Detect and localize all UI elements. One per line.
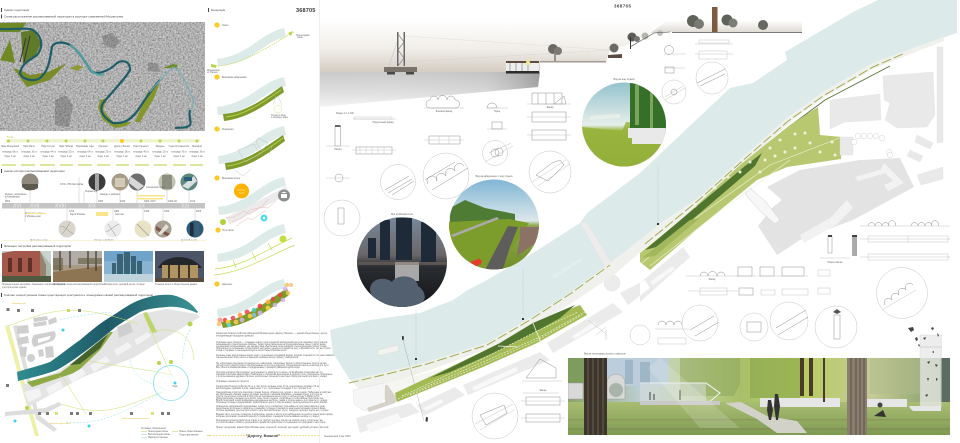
viewpoint dashed links [416,166,658,368]
programme columns text and bars: берег 3 км [191,156,203,158]
programme columns text and bars: Дорогу, Вишня [114,146,131,148]
history timeline bar: XVII [30,204,39,210]
programme columns text and bars: площадь 64 га [77,152,93,154]
panorama: water [320,72,540,107]
programme columns text and bars: берег 1 км [154,156,166,158]
photo circle: lawn and deck [582,78,666,166]
heading: site photos: Фиксация: застройка рассматриваемой территории [4,244,71,248]
history timeline bar: XVI [13,204,21,210]
floating barge on plan [378,345,399,356]
photo: brick factory [2,251,51,282]
programme columns text and bars: Парк Сетунь [41,146,56,148]
programme columns text and bars: Воробьёвы горы [76,146,94,148]
history timeline bar [2,203,205,210]
programme columns text and bars: Парк Фили [23,145,35,148]
photo: bare trees [53,251,102,282]
explanatory text block: спорта, культурных событий и прогулок на протяжении всего года, в любую погоду и время суток. [216,395,321,398]
aerial map of Moskva river [0,22,205,131]
drawing sheet label: Разрез 1-1 1:100 [336,113,354,115]
history captions: 1700–1750 Застройка [60,183,84,186]
programme columns text and bars: Марьино [192,146,202,148]
diagram 1: links: Связи [222,25,229,27]
pavilion with stair drawings: Фасад [547,106,554,109]
explanatory text block: Реализация проекта разбита на этапы и не требует крупных затрат на первом этапе строительства, [216,420,323,422]
photo circle: night city screen [355,214,450,310]
panorama section drawings: left [380,96,513,200]
programme columns text and bars: площадь 30 га [21,152,37,154]
programme columns text and bars: Парк Горького [133,146,149,148]
diagram 1: links: от. Вишня [207,72,218,74]
context plan: cyan dashed routes [60,312,190,423]
diagram 2: embankment [214,74,288,121]
history captions: Заводы и фабрики [100,193,121,196]
programme columns text and bars: площадь 40 га [133,152,149,154]
promenade strip [350,37,944,390]
history captions [5,183,202,242]
history photos, top row [22,174,198,190]
upper right small drawings [662,40,733,104]
programme columns text and bars: площадь 70 га [171,152,187,154]
diagram 4: Moscow City link [214,175,290,226]
history timeline bar: XX [138,204,145,210]
explanatory text block: которые дополняют основной маршрут и расширяют сценарии использования на воде и у воды. [216,415,319,418]
page corner mark [207,434,210,436]
context plan: legend: Точки притяжения [179,434,199,436]
explanatory text block: Проект предлагает новый образ Москвы-реки: открытый, зелёный, цветущий, удобный для всех жителей. [216,426,329,429]
diagram 5: paths: Пути связи [222,230,234,232]
explanatory text block: как связующий элемент между деловым центром и жилыми районами, создавая среду для отдыха, [216,393,323,396]
programme columns text and bars: Парк Мещерский [1,145,20,148]
context plan: green nodes [25,322,192,410]
explanatory text block: Особое внимание уделено доступности для маломобильных групп, пандусы проходят вдоль всех террас. [216,410,330,412]
explanatory text block: Водная часть получает плавучие платформы, причал и места для наблюдения за рекой и панорамой города, [216,413,334,416]
programme columns text and bars: площадь 22 га [95,152,111,154]
diagram 2: embankment: Спуски к воде [271,115,287,117]
tower drawings: Разрез [334,149,342,151]
photo circle: cycle path [449,175,539,270]
explanatory text block: велосипедные дорожки 4,2 км, павильоны 7 шт., смотровые площадки 3 шт., причал 1 шт. [216,388,312,390]
explanatory text block: определяющим образ места и дающим название всему проекту набережной. [216,356,299,359]
programme columns text and bars: Лужники [98,146,108,148]
photo captions: и исторические здания [2,287,27,289]
programme columns text and bars: берег 2 км [97,156,109,158]
project slogan: "Дорогу, Вишня!" [246,433,280,438]
lower sketch: centre [472,359,565,439]
history captions: Дворцовые сады [25,213,43,215]
programme columns text and bars: площадь 18 га [114,152,130,154]
diagram 6: colourful cherry blossoms: Цветение [222,284,233,286]
river label: МОСКВА РЕКА [552,257,583,279]
long pavilion elevation [352,117,396,154]
explanatory text block: Территория благоустройства 22 га, в том числе зелёные зоны 14 га, пешеходные дорожки 3,5 км, [216,385,320,388]
context plan: yellow labels: Новые общественные пространства [122,418,149,420]
panorama: viewing rays [405,36,610,62]
history captions: 1930 [120,201,126,203]
programme columns text and bars: площадь 36 га [189,152,205,154]
context plan: legend: Новые общественные [179,431,203,433]
explanatory text block: связывающих существующие районы. Территория разделена на функциональные зоны с различными [216,343,326,346]
history divider [2,240,206,242]
photo captions: Прибрежная зона рассматриваемой территории [53,283,105,286]
explanatory text block: Ландшафтная структура повторяет линию берега, образуя ряд террас и тихих садов. Набережная работает [216,391,332,394]
programme columns text and bars: берег 4 км [173,156,185,158]
programme columns text and bars: Сады Коломенское [169,146,190,148]
diagram 1: links: Пешеходная [296,35,310,37]
photo captions: Москва-Сити: деловой центр столицы [104,283,145,286]
programme columns text and bars: берег 4 км [60,156,72,158]
heading: concept: Концепция [211,8,226,12]
history captions: 1700 [69,211,75,213]
programme columns text and bars: Парк Победы [59,146,73,148]
programme columns text and bars: площадь 58 га [2,152,18,154]
context plan: legend: Велосипедная связь [148,434,171,436]
history captions: 1880 [98,201,104,203]
history highlight marks [26,195,165,216]
panorama: trees and ground [540,7,802,62]
diagram 1: links [207,22,310,74]
history timeline bar: XVIII [55,204,66,210]
upper park [640,107,842,270]
history captions: 2010 [190,201,196,203]
context plan: connection lines [8,310,194,414]
history captions: Первое упоминание [5,194,27,196]
explanatory text block: Сезонные посадки поддерживают разнообразие цвета и обеспечивают привлекательность набережной. [216,401,328,404]
context site plan [5,295,200,436]
plan label: Генеральный план 1:500 [324,435,351,438]
explanatory text block: Все объекты взаимосвязаны и поддерживают сценарий движения вдоль воды. [216,366,301,369]
panorama: upper sky gradient [650,20,802,33]
history captions: Сталинский план [146,186,165,189]
history captions: Деловой центр [181,239,198,242]
explanatory text block: Предусмотрены площадки для детей, зоны тихого отдыха, спортивные и событийные пространства. [216,397,324,400]
explanatory text block: Предлагается сохранение исторической застройки, раскрытие видов на реку и Москва-Сити, новые спуски [216,347,331,350]
pedestrian bridge [580,221,620,291]
explanatory text block: лёгкие конструкции которых сформированы из круглых модулей, объединённых вдоль пешеходного пути. [216,364,330,367]
explanatory text block: Основная идея проекта — создание нового типа городской набережной как цепи парковых пространств, [216,341,328,344]
context plan: cyan radius circle: Парк [172,386,179,388]
history captions: 1990–00 [168,201,178,203]
photo captions: Промышленная застройка, Хамовники, кирпичные корпуса [2,283,66,286]
heading: historical analysis: Анализ истории рассматриваемой территории [4,169,65,173]
sketch row: right middle [588,267,928,348]
right plan: buildings [830,47,943,185]
context plan: yellow labels [12,303,149,425]
history captions: 1960–1970 [144,201,156,203]
upper right elevations [820,221,950,264]
project number, panel 3: 368705 [614,4,632,8]
diagram 3: connections [214,126,286,176]
history timeline bar: XXI [181,204,189,210]
right plan: tree clusters [851,133,893,158]
diagram 6: colourful cherry blossoms [214,279,293,328]
history leader lines [6,177,195,222]
panel divider [318,0,320,443]
panorama section drawings: left: Торец [494,111,501,113]
programme columns text and bars: берег 1 км [116,156,128,158]
explanatory text block [216,332,337,429]
history captions: 1880 [114,211,120,213]
diagram 4: Moscow City link: Москва- [237,190,246,192]
lower plan: left plaza and buildings [353,247,690,433]
programme columns text and bars: берег 3 км [42,156,54,158]
project number, panel 4: 368705 [933,4,951,8]
right plan: industrial block [745,158,914,255]
history captions: Карта Москвы [70,214,85,216]
heading: territory analysis: Анализ территории [4,8,30,12]
context plan: legend [141,428,203,439]
panorama: floating tower [384,32,417,74]
programme columns text and bars: берег 3 км [4,156,16,158]
photo captions [2,283,198,289]
rendering title: Вид на пешеходную аллею и павильон [584,354,626,356]
context plan: legend: Маршруты речные [148,437,169,439]
programme columns text and bars: берег 3 км [135,156,147,158]
history captions: 1935 [144,211,150,213]
explanatory text block: Вдоль береговой линии размещены деревянные настилы, лавки и лёгкие навесы для защиты от дождя. [216,399,328,402]
programme columns text and bars: площадь 52 га [58,152,74,154]
promenade: dark hedge [760,66,890,150]
history captions: 1500 [5,201,11,203]
history captions: Дворцовые сады [30,240,48,242]
panorama section drawings: left: Боковой фасад [436,110,453,113]
context plan: yellow labels: Пешеходная связь [12,303,26,305]
history photos, bottom row [58,220,204,238]
history captions: Заводы и фабрики [94,239,115,242]
context plan: map markers [6,308,170,428]
photo circle: cycle path: Вид на набережную и зону отдыха [476,176,513,178]
project number, panel 2: 368705 [296,8,316,14]
programme timeline row: 5 км [7,135,13,139]
panorama: sky gradient [320,20,668,72]
programme columns text and bars: берег 2 км [23,156,35,158]
photo: Moscow City [104,251,153,282]
history captions: о Хамовниках [5,196,21,198]
photo circle: night city screen: Вид на Москва-Сити [391,214,414,216]
history timeline bar: XIX [88,204,97,210]
upper right elevations: Разрез башни [828,262,843,264]
context plan: legend: Условные обозначения [141,428,167,430]
context plan: cyan radius circle [154,366,188,400]
panorama: floating pavilion [506,57,539,74]
diagram 2: embankment: и зелёные зоны [271,117,288,119]
explanatory text block: Система дорожек обеспечивает непрерывность маршрута и связь с ближайшими станциями метро, [216,371,323,374]
photo: station pavilion [155,251,204,282]
programme columns text and bars: Зарядье [156,146,165,148]
history captions: у Москвы-реки [25,216,41,218]
explanatory text block: Зелёные зоны расположены вдоль реки с сезонными посадками вишни, которая становится главным символом, [216,355,337,357]
explanatory text block: Концепция благоустройства набережной Москвы-реки «Дорогу, Вишня!» — новый общественный центр, [216,332,328,335]
rendering: park panorama [568,358,950,435]
explanatory text block: На территории предлагается разместить павильоны, смотровые башни и общественные пространства, [216,363,327,365]
explanatory text block: с использованием дерева и бетона, экологичных решений и местных пород растений для всего сезона. [216,375,327,378]
explanatory text block: сценариями использования, где каждая зона обеспечена пешеходными и велосипедными маршрутами. [216,346,328,348]
explanatory text block: светильники встроены в парапеты и скамейки, а башни становятся заметными ночными ориентирами. [216,407,326,410]
programme timeline row [6,135,200,143]
history captions: Первая ж/д [85,191,98,193]
long pavilion elevation: Продольный фасад [372,121,394,124]
section markers [402,336,428,422]
history captions: 2005 [196,211,202,213]
tower drawings [324,125,360,236]
history captions: Генплан [115,214,124,216]
explanatory text block: парками и жилыми кварталами. Навигация и освещение выполнены в едином стиле, материалы природные, [216,374,333,376]
photo circle: lawn and deck: Вид на зону отдыха [614,79,635,81]
diagram 1: links: связь [297,37,304,39]
programme columns text and bars [1,145,205,166]
explanatory text block: объединяющий городские функции. [216,334,255,338]
heading: map scheme: Схема расположения рассматриваемой территории в структуре современной Москвы-реки [4,14,124,18]
diagram 3: connections: Рекреация [222,129,234,131]
diagram 4: Moscow City link: Вишнёвая аллея [222,178,241,180]
lower park: planted terraces [395,305,587,402]
observation tower with birds [908,327,942,411]
heading: site plan: Генплан: концептуальная схема существующих пространств и планируемых связей рассматриваемой территории [4,293,153,297]
lower sketch: centre: Фасад [540,389,547,392]
promenade: planted edge [349,53,905,383]
programme columns text and bars: площадь 44 га [40,152,56,154]
river plan: Moscow river [330,0,957,380]
context plan: legend: Пешеходная связь [148,431,169,433]
viewpoint markers [415,223,659,360]
programme columns text and bars: площадь 13 га [152,152,168,154]
pavilion with stair drawings [527,93,571,193]
project slogan [207,433,320,438]
diagram 2: embankment: Вишнёвая набережная [222,77,247,79]
diagram 1: links: Московская [207,70,220,72]
explanatory text block: Освещение набережной подчёркивает линии пути и позволяет пользоваться пространством вечером; [216,405,325,408]
programme columns text and bars: берег 5 км [79,156,91,158]
photo captions: Станция метро и общественное здание [155,284,198,286]
explanatory text block: что обеспечивает гибкость дальнейшего развития территории и сохранение её природного характера. [216,421,326,424]
explanatory text block: к воде и террасы с озеленением вдоль всего берега Москвы-реки. [216,350,287,352]
explanatory text block: Основные показатели проекта: [216,381,250,383]
diagram 4: Moscow City link: Сити [239,192,245,194]
diagram 5: paths [214,224,295,275]
sketch row: right middle: Фасад [709,278,716,281]
context plan: yellow labels: Набережная Дорогу, Вишня! [50,423,72,425]
history captions: 1990 [164,211,170,213]
